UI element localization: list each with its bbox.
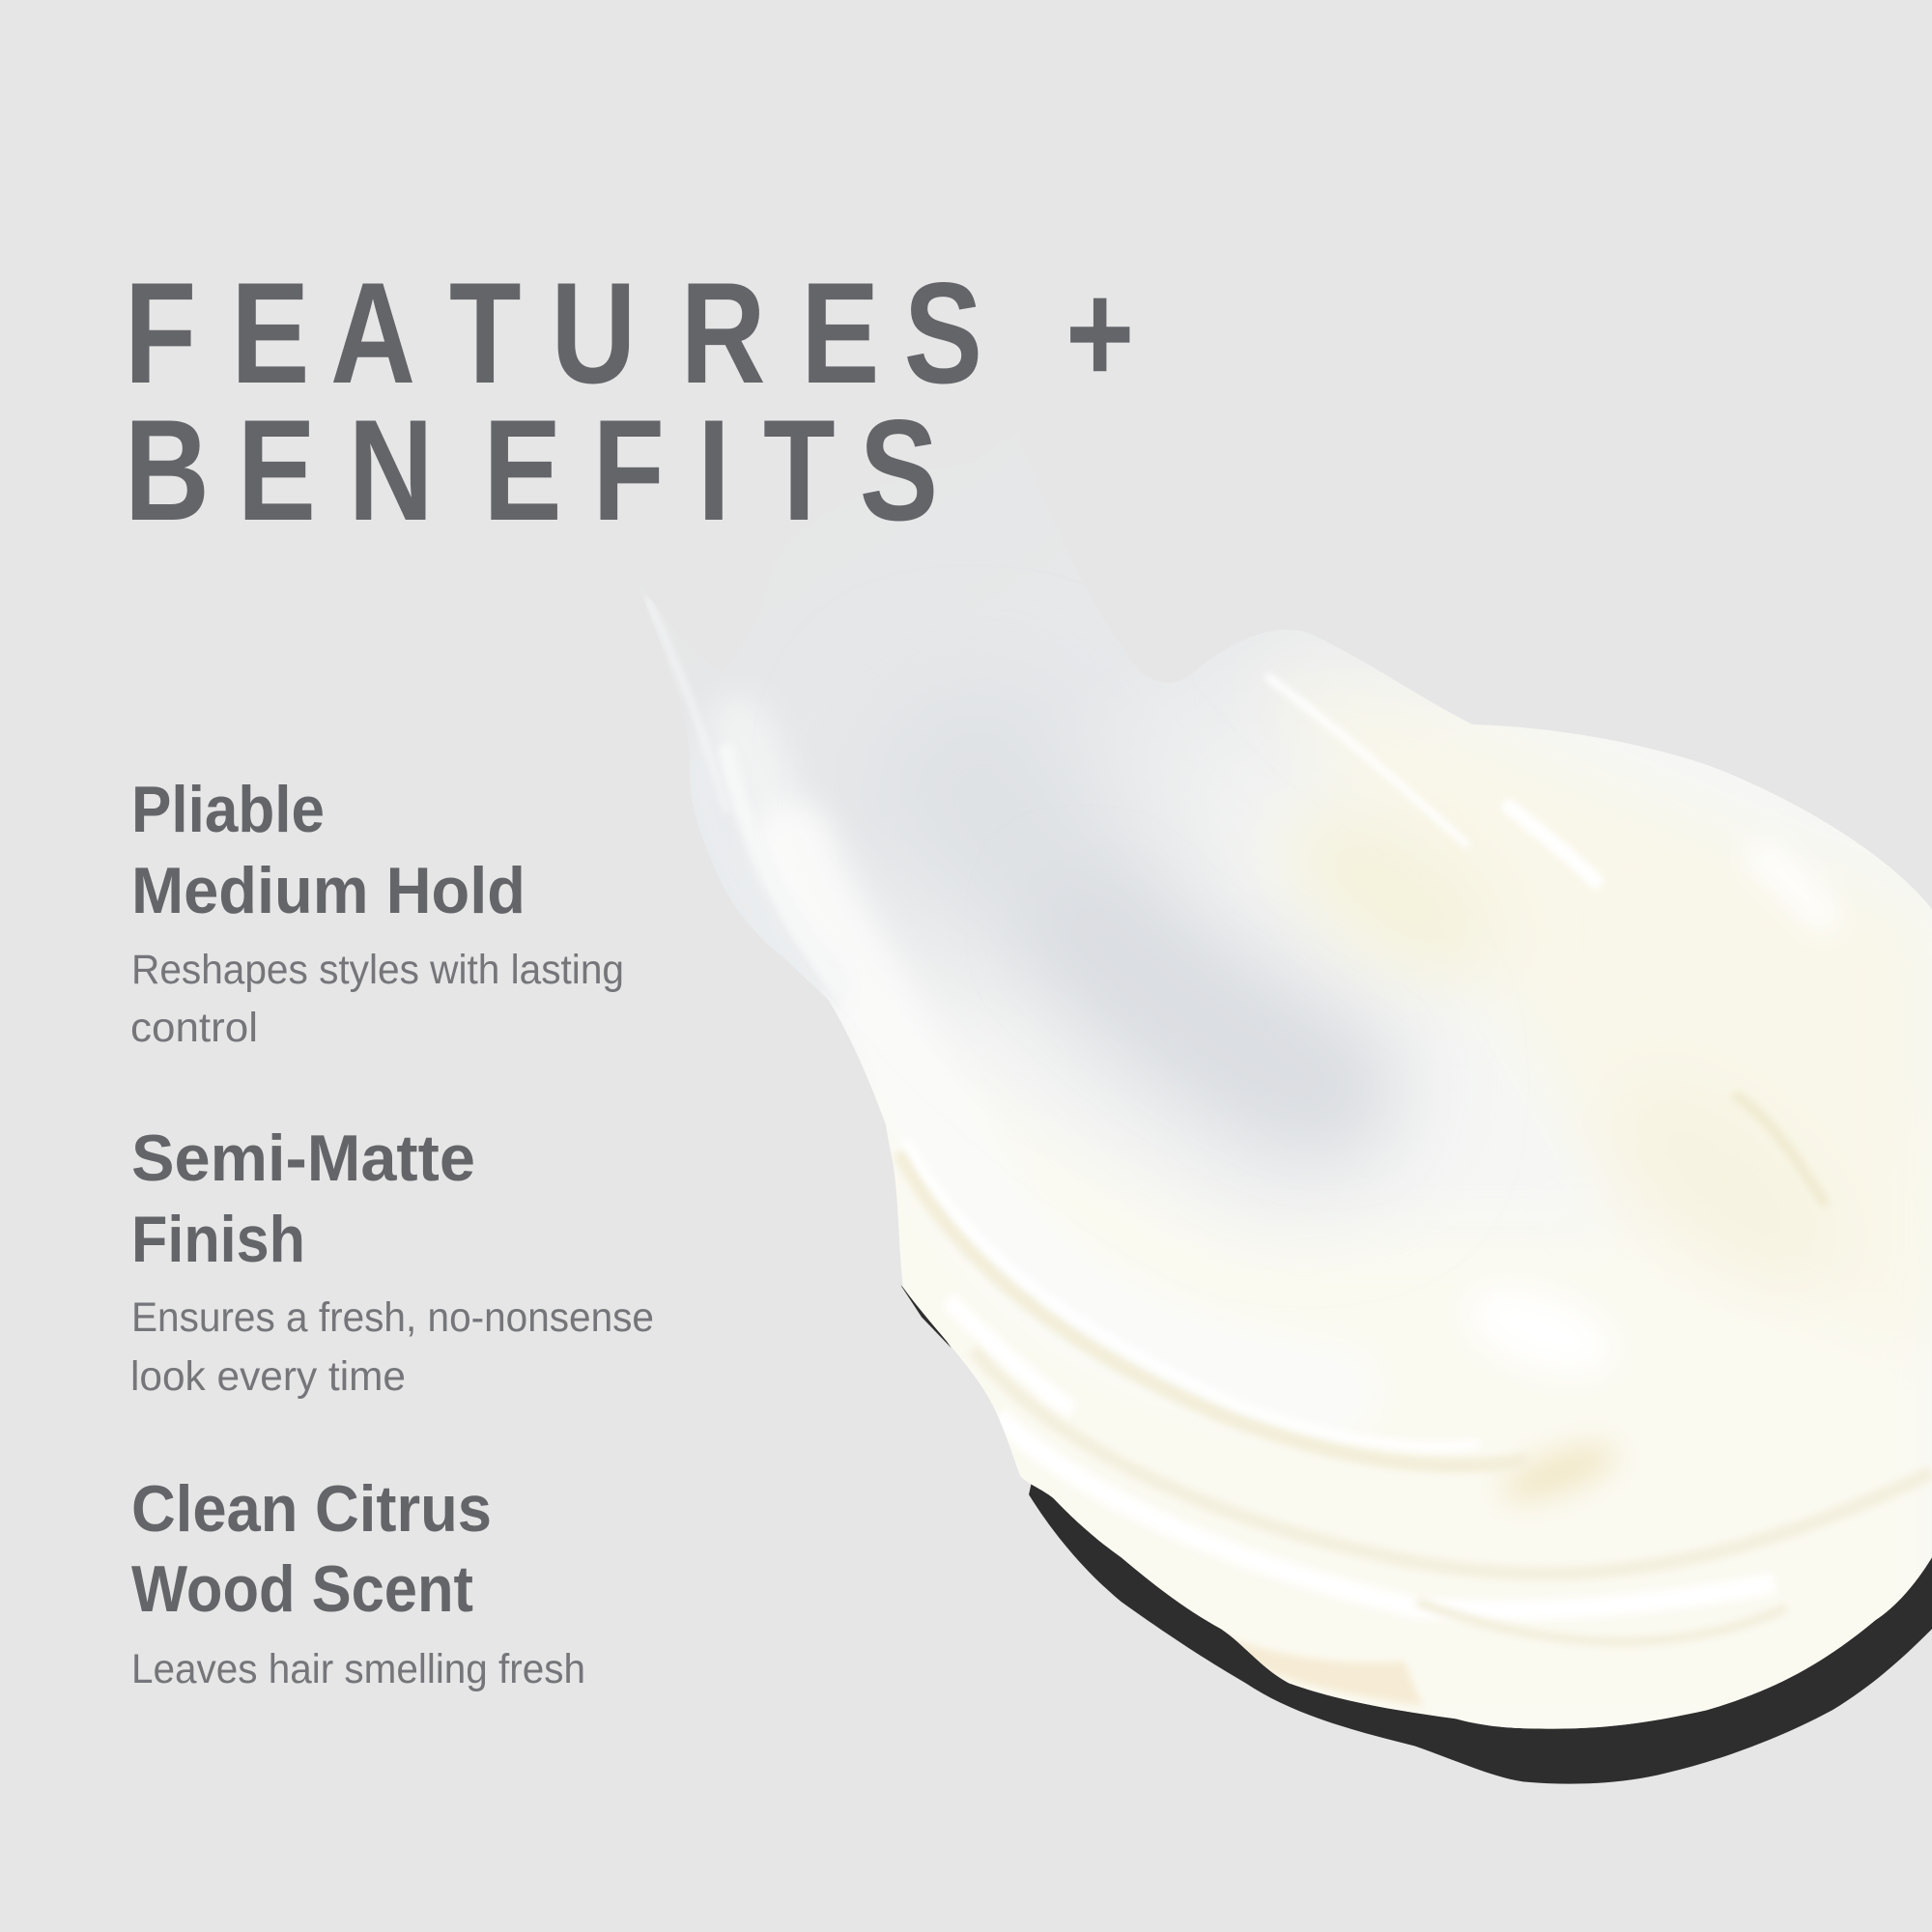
feature: semi-matte finish (130, 1122, 654, 1400)
title plus sign: + (1065, 252, 1134, 413)
heading line 2: Medium Hold (131, 854, 526, 927)
description line 2: control (130, 1005, 258, 1051)
title line 2: BENEFITS (125, 389, 938, 551)
infographic canvas (131, 282, 1932, 1784)
description: Reshapes styles with lasting (131, 947, 624, 993)
feature: clean citrus wood scent (131, 1472, 585, 1692)
cream body (647, 601, 1932, 1729)
product image: cream swatch (647, 601, 1932, 1784)
cast shadow under cream (900, 1285, 1932, 1784)
title (125, 252, 1134, 551)
description: Ensures a fresh, no-nonsense (131, 1294, 654, 1341)
description: Leaves hair smelling fresh (131, 1646, 585, 1692)
heading: Clean Citrus (131, 1472, 492, 1546)
feature: pliable medium hold (130, 773, 624, 1051)
title line 1: FEATURES (125, 252, 982, 413)
heading: Semi-Matte (131, 1122, 475, 1195)
heading line 2: Finish (131, 1203, 305, 1276)
description line 2: look every time (130, 1353, 406, 1400)
heading line 2: Wood Scent (131, 1552, 473, 1626)
heading: Pliable (131, 773, 325, 846)
